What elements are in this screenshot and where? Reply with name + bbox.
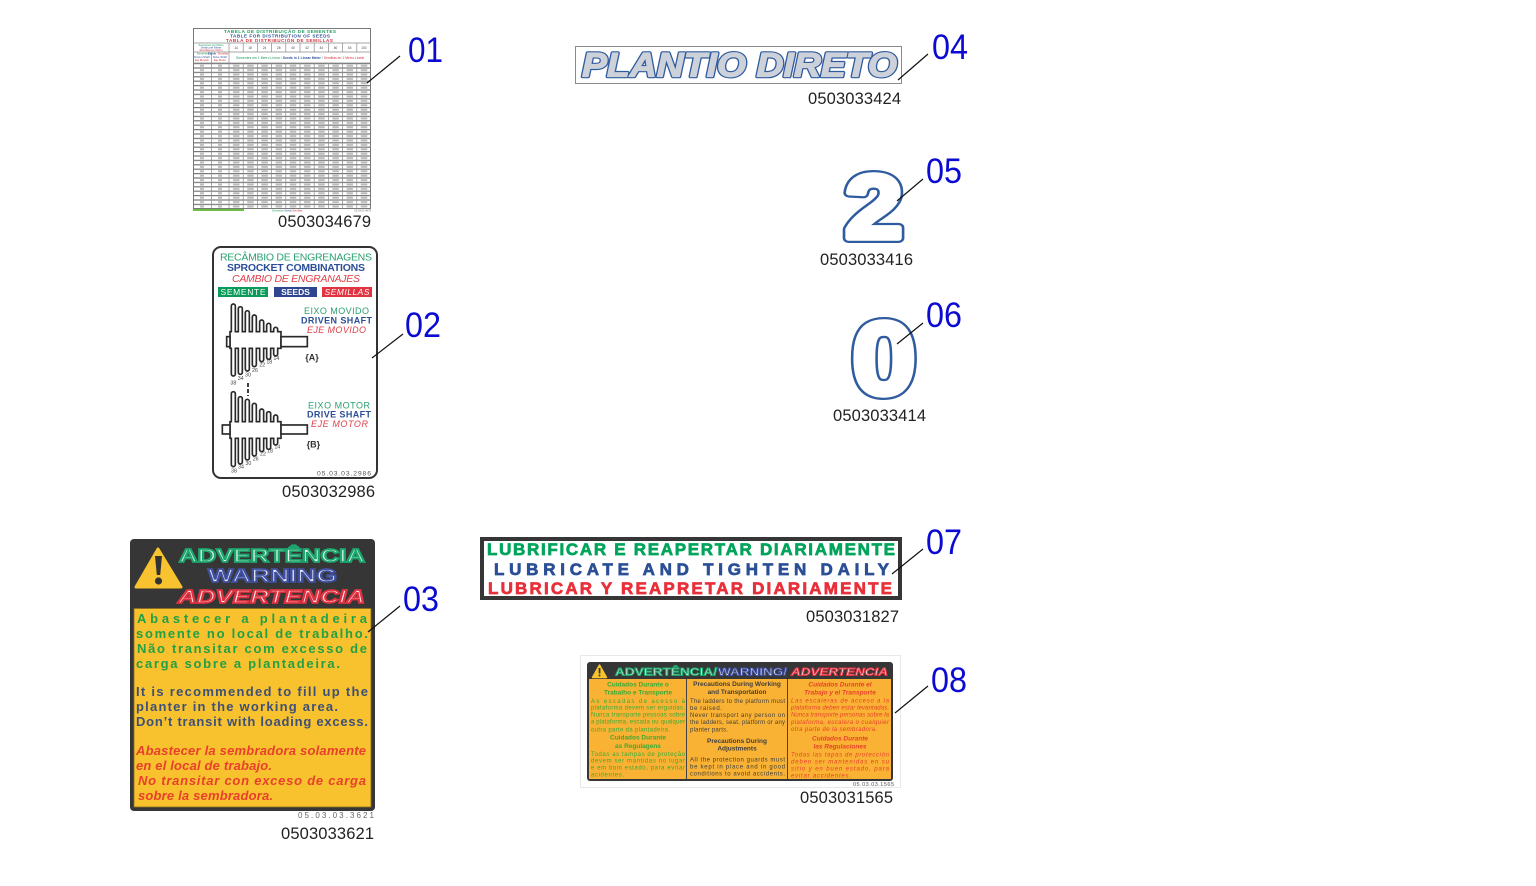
leader line 07 xyxy=(892,549,923,574)
sprocket diagram B xyxy=(222,392,321,475)
precautions message area xyxy=(589,679,891,779)
drive shaft label: DRIVE SHAFT xyxy=(307,410,372,420)
driven shaft label: EJE MOVIDO xyxy=(307,325,366,335)
language tags xyxy=(218,287,372,297)
precautions column: Portuguese: a plataforma, escada ou qualquer xyxy=(591,720,685,726)
sprocket heading: CAMBIO DE ENGRANAJES xyxy=(232,273,360,285)
small warning triangle icon xyxy=(592,665,606,678)
decal lettering: PLANTIO DIRETO xyxy=(582,46,897,84)
sprocket diagram B: 22 xyxy=(260,452,266,458)
panel 08: operating precautions warning xyxy=(580,656,900,788)
precautions column dividers xyxy=(686,679,788,779)
driven shaft label xyxy=(301,306,372,335)
precautions column: English: Never transport any person on xyxy=(690,713,785,719)
decal: number 0: 0 xyxy=(852,302,916,417)
precautions column: Spanish: Trabajo y el Transporte xyxy=(804,690,876,696)
panel 04: Plantio Direto decal xyxy=(576,46,902,84)
precautions column: Portuguese: devem ser mantidas no lugar xyxy=(591,758,685,764)
precautions column: Portuguese: Cuidados Durante xyxy=(610,734,666,742)
precautions column: English xyxy=(690,681,785,778)
sprocket panel frame xyxy=(213,247,377,478)
part number 08: 0503031565 xyxy=(800,789,893,807)
part number 03: 0503033621 xyxy=(281,825,374,843)
precautions column: Spanish: Todas las tapas de protección xyxy=(791,752,890,758)
part number 05: 0503033416 xyxy=(820,251,913,269)
precautions column: English: planter parts. xyxy=(690,728,728,734)
precautions column: English: conditions to avoid accidents. xyxy=(690,772,785,778)
message in Portuguese: somente no local de trabalho. xyxy=(136,626,368,641)
table footer: 05.03.03.4679 xyxy=(354,208,372,212)
precautions column: Portuguese: Cuidados Durante o xyxy=(607,682,669,688)
precautions column: Portuguese: plataforma devem ser erguidas. xyxy=(591,706,685,712)
table column numbers: 14 xyxy=(234,46,238,50)
message in Spanish xyxy=(135,743,366,803)
decal: number 2: 2 xyxy=(845,157,903,257)
precautions header: ADVERTENCIA xyxy=(790,666,888,678)
table frame and grid xyxy=(193,28,371,208)
table header cells: Seeds xyxy=(208,52,217,56)
sprocket diagram B: 14 xyxy=(274,444,280,450)
message in English: planter in the working area. xyxy=(136,699,338,714)
precautions column: Portuguese: As escadas de acesso à xyxy=(591,699,686,705)
table footer: Sementes Seeds Semillas xyxy=(272,208,303,212)
precautions header xyxy=(615,666,888,678)
warning panel code: 05.03.03.3621 xyxy=(298,811,375,820)
language tags: SEEDS xyxy=(281,287,310,297)
precautions column: Portuguese: acidentes. xyxy=(591,772,624,778)
panel 01: seed distribution table xyxy=(193,28,372,212)
message in English: It is recommended to fill up the xyxy=(136,684,368,699)
table column numbers: 44 xyxy=(320,46,323,50)
warning titles xyxy=(177,545,365,607)
warning triangle icon xyxy=(136,549,181,587)
part number 06: 0503033414 xyxy=(833,407,926,425)
message in Portuguese xyxy=(136,611,368,671)
table column numbers: 42 xyxy=(305,46,309,50)
table header cells: Eje Movido xyxy=(195,58,209,62)
precautions column: English: All the protection guards must xyxy=(690,758,785,764)
sprocket diagram A: 34 xyxy=(238,376,244,382)
leader line 02 xyxy=(372,334,403,358)
precautions outer border xyxy=(580,656,900,788)
precautions header: WARNING/ xyxy=(718,666,787,678)
precautions column: English: The ladders to the platform must xyxy=(690,699,785,705)
precautions column: Spanish: deben ser mantenidas en su xyxy=(791,760,890,766)
table title: TABLA DE DISTRIBUCIÓN DE SEMILLAS xyxy=(226,36,333,43)
table column numbers: 54 xyxy=(348,46,352,50)
precautions column: Portuguese: Todas as tampas de proteção xyxy=(591,752,686,758)
precautions column: Portuguese: e em bom estado, para evitar xyxy=(591,766,685,772)
sprocket diagram B: 38 xyxy=(231,469,237,475)
table column numbers xyxy=(234,46,367,50)
message in Spanish: sobre la sembradora. xyxy=(138,788,273,803)
table column numbers: 28 xyxy=(277,46,281,50)
callout number 06: 06 xyxy=(926,296,962,335)
panel 07: lubrication decal xyxy=(482,539,900,598)
message in Spanish: No transitar con exceso de carga xyxy=(138,773,366,788)
table header cells: Seeds per Meter xyxy=(201,46,221,50)
panel 02: sprocket combinations xyxy=(213,247,377,478)
table header cells: Eje Motor xyxy=(214,58,226,62)
warning titles: ADVERTENCIA xyxy=(177,587,365,607)
precautions column: Spanish: Cuidados Durante el xyxy=(808,682,872,688)
callout number 04: 04 xyxy=(932,28,968,67)
precautions header: ADVERTÊNCIA/ xyxy=(615,666,717,678)
driven shaft label: DRIVEN SHAFT xyxy=(301,316,372,326)
sprocket diagram B: {B} xyxy=(307,440,321,450)
warning message box xyxy=(134,608,371,807)
precautions column: Spanish: Nunca transporte personas sobre la xyxy=(791,712,890,718)
sprocket diagram A: 14 xyxy=(273,356,279,362)
driven shaft label: EIXO MOVIDO xyxy=(304,306,369,316)
message in English: Don’t transit with loading excess. xyxy=(136,714,368,729)
leader line 04 xyxy=(898,54,928,80)
table header cells: Sementes xyxy=(197,52,210,56)
callout number 02: 02 xyxy=(405,306,441,345)
callout number 07: 07 xyxy=(926,523,962,562)
precautions column: Portuguese: outra parte da plantadeira. xyxy=(591,728,670,734)
precautions column: Spanish: Las escaleras de acceso a la xyxy=(791,698,890,704)
part number 02: 0503032986 xyxy=(282,483,375,501)
table title: TABELA DE DISTRIBUIÇÃO DE SEMENTES xyxy=(224,28,336,34)
precautions column: Portuguese: as Regulagens xyxy=(615,743,661,750)
sprocket diagram B: 34 xyxy=(238,465,244,471)
leader line 08 xyxy=(895,686,928,713)
lubrication frame xyxy=(482,539,900,598)
sprocket diagram B: 26 xyxy=(253,456,259,462)
table column numbers: 40 xyxy=(291,46,295,50)
precautions column: Spanish: plataforma, escalera o cualquier xyxy=(790,720,890,726)
sprocket heading: SPROCKET COMBINATIONS xyxy=(227,262,365,274)
table header cells: Semillas xyxy=(218,52,229,56)
drive shaft label xyxy=(307,400,372,429)
table footer xyxy=(193,208,372,212)
warning titles: ADVERTÊNCIA xyxy=(179,545,365,566)
table header cells xyxy=(194,43,229,62)
table header cells: Semillas por Metro xyxy=(199,48,223,52)
precautions column: English: the ladders, seat, platform or any xyxy=(690,720,785,726)
precautions column: Spanish: evitar accidentes. xyxy=(791,774,851,780)
precautions column: English: be kept in place and in good xyxy=(690,764,785,770)
language tags: SEMILLAS xyxy=(324,287,370,297)
drive shaft label: EIXO MOTOR xyxy=(308,400,370,410)
lubrication English line: LUBRICATE AND TIGHTEN DAILY xyxy=(494,560,890,579)
sprocket diagram A: 38 xyxy=(230,380,236,386)
leader line 05 xyxy=(897,179,923,201)
decal frame xyxy=(576,46,902,84)
table column numbers: 100 xyxy=(361,46,367,50)
table column numbers: 18 xyxy=(248,46,252,50)
table units caption: Sementes em 1 Metro Linear / Seeds in 1 Linear Meter / Semillas en 1 Metro Lineal xyxy=(236,56,364,60)
precautions column: Portuguese: Trabalho e Transporte xyxy=(604,689,672,696)
message in Spanish: en el local de trabajo. xyxy=(136,758,272,773)
warning titles: WARNING xyxy=(208,566,337,586)
message in Portuguese: Não transitar com excesso de xyxy=(137,641,367,656)
message in English xyxy=(136,684,368,729)
table title: TABLE FOR DISTRIBUTION OF SEEDS xyxy=(230,34,330,38)
table header cells: Driven Shaft xyxy=(194,55,210,59)
sprocket heading xyxy=(220,250,372,285)
precautions column: Spanish: sitio y en buen estado, para xyxy=(791,766,890,772)
language tags: SEMENTE xyxy=(220,287,266,297)
precautions column: Portuguese: Nunca transporte pessoas sobre xyxy=(591,712,686,718)
warning panel background xyxy=(130,539,375,811)
table column numbers: 24 xyxy=(263,46,266,50)
decal: number 2: 2 xyxy=(845,157,903,257)
part number 01: 0503034679 xyxy=(278,213,371,231)
part number 04: 0503033424 xyxy=(808,90,901,108)
message in Portuguese: carga sobre a plantadeira. xyxy=(136,656,340,671)
sprocket diagram A: 22 xyxy=(259,363,265,369)
precautions panel background xyxy=(587,662,893,781)
callout number 01: 01 xyxy=(408,31,443,70)
drive shaft label: EJE MOTOR xyxy=(311,419,368,429)
precautions column: Spanish: las Regulaciones xyxy=(813,744,867,750)
decal: number 0: 0 xyxy=(852,302,916,417)
leader line 06 xyxy=(897,323,923,344)
message in Spanish: Abastecer la sembradora solamente xyxy=(135,743,366,758)
part number 07: 0503031827 xyxy=(806,608,899,626)
table header cells: Sementes por Metro xyxy=(198,43,224,47)
sprocket diagram A: {A} xyxy=(305,353,319,363)
precautions column: English: Precautions During xyxy=(707,738,767,745)
sprocket diagram B: 30 xyxy=(245,461,251,467)
precautions column: Spanish: plataforma deben estar levantadas. xyxy=(790,706,889,712)
leader line 01 xyxy=(367,56,400,83)
table column numbers: 50 xyxy=(334,46,337,50)
callout number 05: 05 xyxy=(926,152,962,191)
table header cells: Drive Shaft xyxy=(213,55,227,59)
precautions column: Spanish xyxy=(790,682,890,780)
sprocket diagram A: 18 xyxy=(266,360,272,366)
panel 03: refuelling warning xyxy=(130,539,375,811)
table title xyxy=(224,28,336,43)
precautions panel code: 05.03.03.1565 xyxy=(853,782,894,788)
precautions column: English: and Transportation xyxy=(708,689,766,696)
shaft link dashes xyxy=(247,383,249,396)
precautions column: Spanish: Cuidados Durante xyxy=(812,736,868,742)
sprocket diagram A: 30 xyxy=(245,372,251,378)
precautions column: English: Adjustments xyxy=(717,746,757,752)
sprocket panel code: 05.03.03.2986 xyxy=(317,470,371,478)
sprocket heading: RECÂMBIO DE ENGRENAGENS xyxy=(220,250,372,264)
precautions column: English: Precautions During Working xyxy=(693,681,781,688)
callout number 08: 08 xyxy=(931,661,967,700)
leader line 03 xyxy=(368,606,400,632)
decal lettering: PLANTIO DIRETO xyxy=(582,46,897,84)
lubrication Spanish line: LUBRICAR Y REAPRETAR DIARIAMENTE xyxy=(488,579,892,598)
callout number 03: 03 xyxy=(403,580,439,619)
sprocket diagram A xyxy=(227,304,319,386)
sprocket diagram B: 18 xyxy=(267,448,273,454)
message in Portuguese: Abastecer a plantadeira xyxy=(137,611,368,626)
lubrication Portuguese line: LUBRIFICAR E REAPERTAR DIARIAMENTE xyxy=(487,540,895,559)
precautions column: Spanish: otra parte de la sembradora. xyxy=(791,727,877,733)
sprocket diagram A: 26 xyxy=(252,368,258,374)
precautions column: Portuguese xyxy=(591,682,686,778)
precautions column: English: be raised. xyxy=(690,706,722,712)
